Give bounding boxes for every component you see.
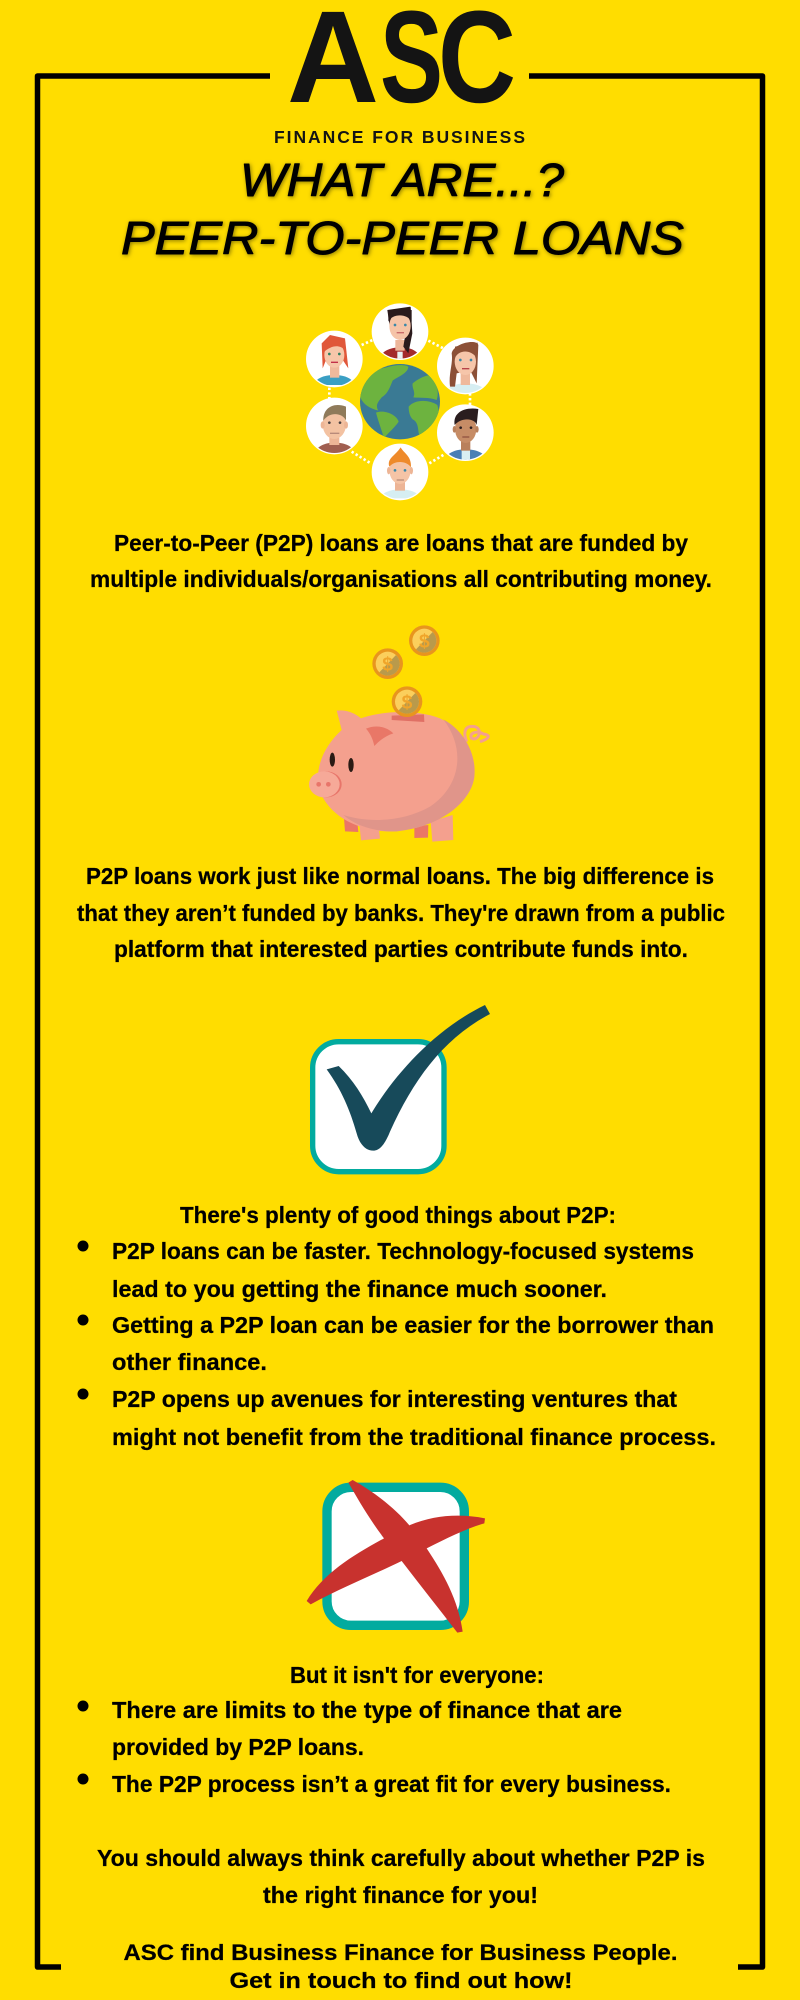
- text: what P2P loans are: Peer-to-Peer (P2P) loans are loans that are funded by: [114, 530, 688, 556]
- list: good things about P2P: There's plenty of good things about P2P:: [180, 1202, 616, 1228]
- icon: piggy bank with coins: [309, 625, 488, 842]
- icon: tick in box: [313, 1005, 490, 1172]
- list: good things about P2P: might not benefit from the traditional finance process.: [112, 1424, 716, 1450]
- list: good things about P2P: Getting a P2P loan can be easier for the borrower than: [112, 1312, 714, 1338]
- list: good things about P2P: [78, 1202, 716, 1450]
- list: drawbacks of P2P: The P2P process isn’t a great fit for every business.: [112, 1771, 671, 1797]
- logo: FINANCE FOR BUSINESS: [274, 127, 525, 147]
- text: closing advice: the right finance for you!: [263, 1882, 538, 1908]
- icon: piggy bank with coins: $: [382, 655, 393, 676]
- title: WHAT ARE...?: [240, 154, 564, 206]
- text: call to action: ASC find Business Finance for Business People.: [124, 1940, 677, 1965]
- list: drawbacks of P2P: provided by P2P loans.: [112, 1734, 364, 1760]
- text: closing advice: You should always think carefully about whether P2P is: [97, 1845, 705, 1871]
- text: what P2P loans are: multiple individuals/organisations all contributing money.: [90, 566, 712, 592]
- title: PEER-TO-PEER LOANS: [121, 212, 684, 264]
- list: drawbacks of P2P: [78, 1662, 671, 1797]
- text: call to action: Get in touch to find out how!: [230, 1968, 572, 1993]
- title: [121, 154, 684, 264]
- list: good things about P2P: other finance.: [112, 1349, 267, 1375]
- list: good things about P2P: lead to you getting the finance much sooner.: [112, 1276, 607, 1302]
- list: drawbacks of P2P: But it isn't for everyone:: [290, 1662, 544, 1688]
- icon: piggy bank with coins: $: [419, 632, 430, 653]
- icon: cross in box: [307, 1480, 485, 1633]
- text: how P2P loans work: [77, 863, 725, 962]
- text: how P2P loans work: platform that interested parties contribute funds into.: [114, 936, 688, 962]
- logo: [274, 0, 525, 147]
- text: how P2P loans work: P2P loans work just like normal loans. The big difference is: [86, 863, 714, 889]
- text: what P2P loans are: [90, 530, 712, 592]
- list: good things about P2P: P2P loans can be faster. Technology-focused systems: [112, 1238, 694, 1264]
- icon: piggy bank with coins: $: [402, 693, 413, 714]
- text: call to action: [124, 1940, 677, 1993]
- list: good things about P2P: P2P opens up avenues for interesting ventures that: [112, 1386, 677, 1412]
- text: how P2P loans work: that they aren’t funded by banks. They're drawn from a public: [77, 900, 725, 926]
- list: drawbacks of P2P: There are limits to the type of finance that are: [112, 1697, 622, 1723]
- icon: people network around globe: [306, 303, 494, 500]
- text: closing advice: [97, 1845, 705, 1908]
